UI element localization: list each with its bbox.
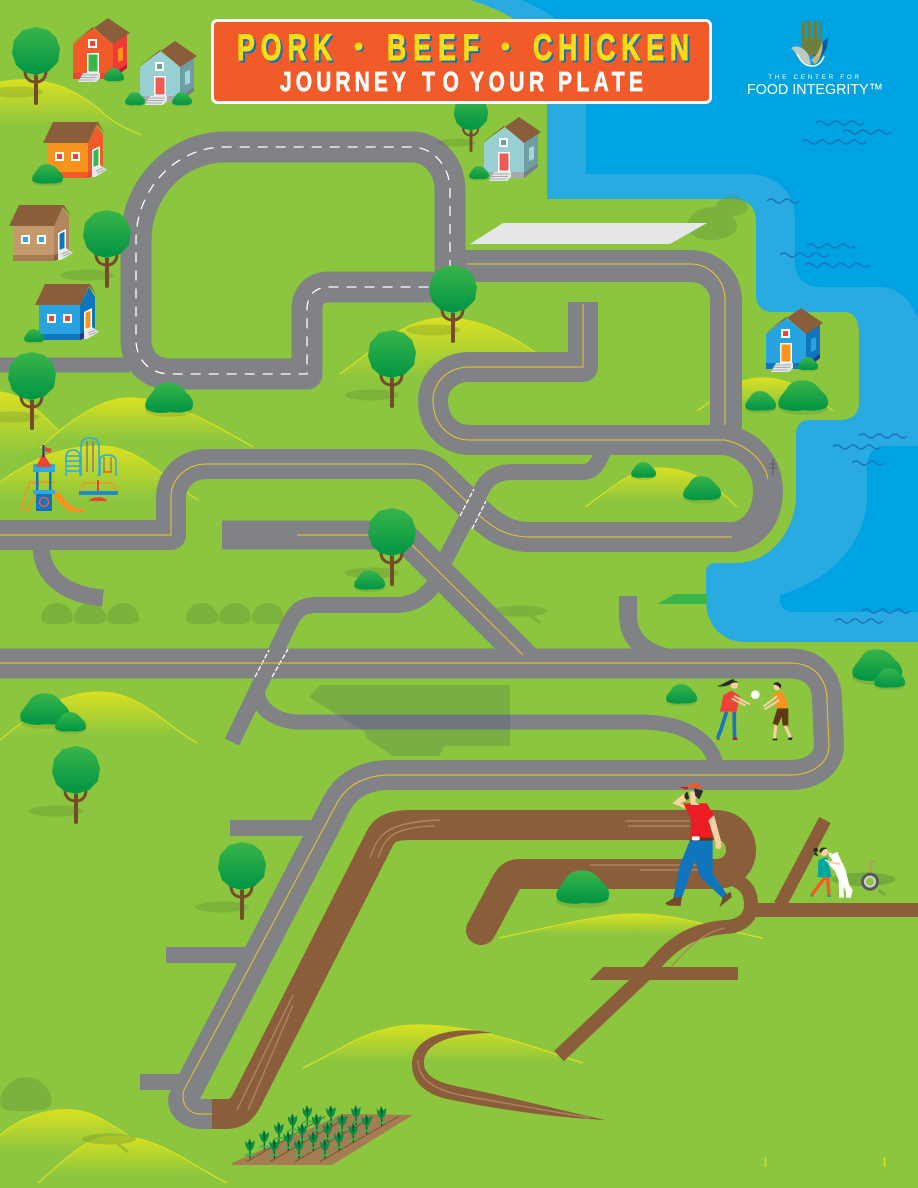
logo wordmark: FOOD INTEGRITY™ bbox=[747, 81, 883, 98]
farmer head bbox=[679, 783, 703, 805]
tree bbox=[195, 842, 266, 920]
dirt road end bbox=[466, 915, 496, 945]
dirt loop bbox=[412, 1030, 605, 1120]
farmer walking bbox=[665, 783, 732, 907]
farmer jeans bbox=[673, 840, 727, 898]
house: blue on peninsula bbox=[764, 308, 823, 372]
house: teal by the lake bbox=[482, 117, 541, 181]
green boat ramp bbox=[657, 594, 707, 604]
ball bbox=[751, 690, 760, 699]
lake deep water bbox=[521, 0, 918, 612]
house: red bbox=[71, 18, 130, 82]
bushes bbox=[20, 68, 905, 908]
title sign bbox=[212, 20, 710, 102]
girl bbox=[810, 848, 832, 897]
house: teal bbox=[138, 41, 197, 105]
player in red bbox=[717, 679, 750, 740]
subtitle: TO bbox=[422, 67, 459, 98]
utility pole bbox=[770, 459, 776, 475]
water waves bbox=[767, 121, 910, 623]
dirt road tracks bbox=[237, 820, 725, 1118]
farmer boots bbox=[665, 892, 732, 907]
farmer arms bbox=[708, 815, 722, 844]
logo small line: THE CENTER FOR bbox=[768, 74, 862, 81]
tree bbox=[60, 210, 131, 288]
tree bbox=[0, 352, 56, 430]
title line shadow: BEEF bbox=[389, 29, 481, 70]
paved roads bbox=[0, 147, 829, 1114]
road shadow of cloud bbox=[309, 685, 510, 756]
tree bbox=[406, 265, 477, 343]
player in orange bbox=[763, 682, 793, 740]
tree by lake house bbox=[437, 96, 488, 152]
ground shadows bbox=[0, 195, 748, 1152]
tree bbox=[345, 508, 416, 586]
house: tan bbox=[9, 205, 73, 261]
subtitle: YOUR bbox=[470, 67, 544, 98]
tree bbox=[345, 330, 416, 408]
tree bbox=[0, 27, 60, 105]
logo mark bbox=[791, 21, 828, 66]
dirt crossroad bbox=[590, 967, 738, 980]
title line: BEEF bbox=[387, 27, 479, 68]
crop field bbox=[232, 1105, 413, 1165]
subtitle: JOURNEY bbox=[280, 67, 406, 98]
title line shadow bbox=[239, 29, 691, 70]
title line bbox=[237, 27, 689, 68]
title line: CHICKEN bbox=[533, 27, 689, 68]
white dog bbox=[828, 852, 853, 898]
small yellow tick marks bbox=[766, 1157, 884, 1167]
climbing frames and swing bbox=[66, 438, 116, 476]
road markings white dashes bbox=[136, 147, 486, 677]
lake shallow water bbox=[470, 0, 918, 642]
tree bbox=[29, 746, 100, 824]
farmer belt bbox=[691, 836, 713, 841]
subtitle: PLATE bbox=[558, 67, 643, 98]
subtitle bbox=[280, 67, 643, 98]
two people playing catch bbox=[717, 679, 793, 740]
dirt roads bbox=[212, 820, 918, 1114]
road markings yellow centre lines bbox=[0, 264, 829, 1114]
runway strip bbox=[470, 223, 707, 244]
title line: PORK bbox=[237, 27, 332, 68]
slide tower bbox=[21, 445, 86, 512]
house: blue bbox=[35, 284, 99, 340]
house: orange bbox=[43, 122, 107, 178]
tire swing bbox=[831, 860, 896, 895]
farmer shirt bbox=[683, 803, 714, 838]
playground bbox=[21, 438, 118, 512]
logo: The Center for Food Integrity bbox=[747, 21, 883, 98]
girl hugging dog and tire swing bbox=[810, 848, 896, 898]
seesaw bbox=[79, 480, 118, 501]
girl's arm bbox=[827, 862, 840, 864]
title line shadow: PORK bbox=[239, 29, 334, 70]
title line shadow: CHICKEN bbox=[535, 29, 691, 70]
